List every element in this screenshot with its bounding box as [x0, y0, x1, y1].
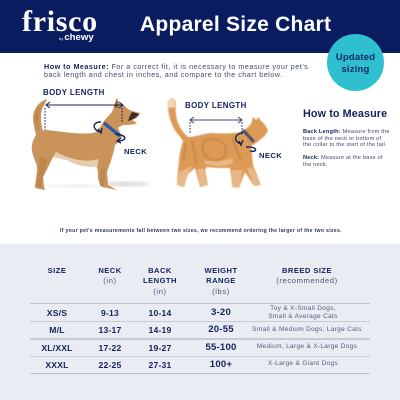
recommendation note: If your pet's measurements fall between two sizes, we recommend ordering the larger of the two sizes.: [60, 228, 342, 234]
size table panel: [0, 244, 400, 400]
how to measure intro: How to Measure: For a correct fit, it is necessary to measure your pet's: [44, 62, 308, 71]
row XL/XXL: XL/XXL: [41, 342, 73, 352]
table header: weight range: RANGE: [206, 276, 236, 285]
row M/L: 13-17: [99, 325, 121, 335]
row M/L: 20-55: [208, 324, 234, 335]
row XS/S: Toy & X-Small Dogs,: [270, 304, 336, 312]
frisco logo: by chewy: [59, 32, 94, 43]
how to measure side panel: [303, 108, 390, 168]
row XL/XXL: 55-100: [205, 342, 237, 352]
table header: neck: NECK: [98, 266, 122, 275]
row XS/S: 10-14: [149, 308, 171, 318]
row XL/XXL: Medium, Large & X-Large Dogs: [257, 343, 357, 350]
title: Apparel Size Chart: [140, 13, 331, 36]
row XL/XXL: 17-22: [99, 342, 121, 352]
row XXXL: 100+: [210, 359, 232, 370]
updated sizing badge: sizing: [341, 64, 370, 74]
row M/L: Small & Medium Dogs, Large Cats: [252, 326, 362, 333]
label: body length dog: BODY LENGTH: [43, 88, 105, 97]
row XS/S: XS/S: [47, 308, 67, 318]
header band: [0, 0, 400, 53]
dog measurement arrows: [44, 102, 126, 144]
row XS/S: 9-13: [101, 308, 119, 318]
how to measure intro: back length and chest in inches, and compare to the chart below.: [44, 70, 283, 79]
how to measure intro: [44, 62, 308, 79]
row XL/XXL: [41, 342, 357, 352]
label: neck dog: NECK: [124, 147, 147, 156]
table header: back length: LENGTH: [143, 276, 177, 285]
row XL/XXL: 19-27: [149, 342, 171, 352]
row M/L: 14-19: [149, 325, 171, 335]
row XS/S: [46, 304, 338, 320]
row XXXL: 22-25: [99, 360, 121, 370]
row XS/S: Small & Average Cats: [268, 312, 338, 320]
table header: back length: BACK: [148, 266, 172, 275]
row XXXL: 27-31: [149, 360, 171, 370]
table header: breed size: (recommended): [276, 276, 338, 285]
side panel heading: How to Measure: [303, 108, 387, 120]
side panel text: back length: Back Length: Measure from the: [303, 129, 390, 135]
frisco logo: frisco: [22, 5, 98, 38]
table header: neck: (in): [103, 276, 117, 285]
cat illustration: [166, 98, 268, 189]
label: body length cat: BODY LENGTH: [185, 101, 247, 110]
table row lines: [30, 303, 370, 374]
side panel text: neck: [303, 155, 383, 168]
label: neck cat: NECK: [259, 151, 282, 160]
table header: back length: (in): [153, 287, 167, 296]
table header: weight range: WEIGHT: [204, 266, 238, 275]
table header: size: SIZE: [48, 266, 66, 275]
row XXXL: XXXL: [45, 360, 69, 370]
table header: back length: [143, 266, 177, 296]
table header: breed size: BREED SIZE: [282, 266, 332, 275]
table header: breed size: [276, 266, 338, 285]
row XXXL: X-Large & Giant Dogs: [268, 360, 338, 367]
dog illustration: [32, 98, 148, 190]
row XS/S: 3-20: [211, 306, 231, 318]
side panel text: back length: [303, 129, 390, 148]
side panel text: neck: the neck.: [303, 162, 328, 168]
side panel text: back length: the collar to the start of the tail.: [303, 142, 387, 148]
updated sizing badge: Updated: [336, 52, 375, 63]
row M/L: [49, 324, 362, 335]
table header: neck: [98, 266, 122, 285]
cat measurement arrows: [189, 116, 256, 152]
updated sizing badge: [327, 34, 384, 91]
side panel text: back length: base of the neck or bottom of: [303, 136, 381, 142]
table header: weight range: (lbs): [212, 287, 230, 296]
row XXXL: [45, 359, 338, 370]
table header: weight range: [204, 266, 238, 296]
side panel text: neck: Neck: Measure at the base of: [303, 155, 383, 161]
row M/L: M/L: [49, 325, 65, 335]
